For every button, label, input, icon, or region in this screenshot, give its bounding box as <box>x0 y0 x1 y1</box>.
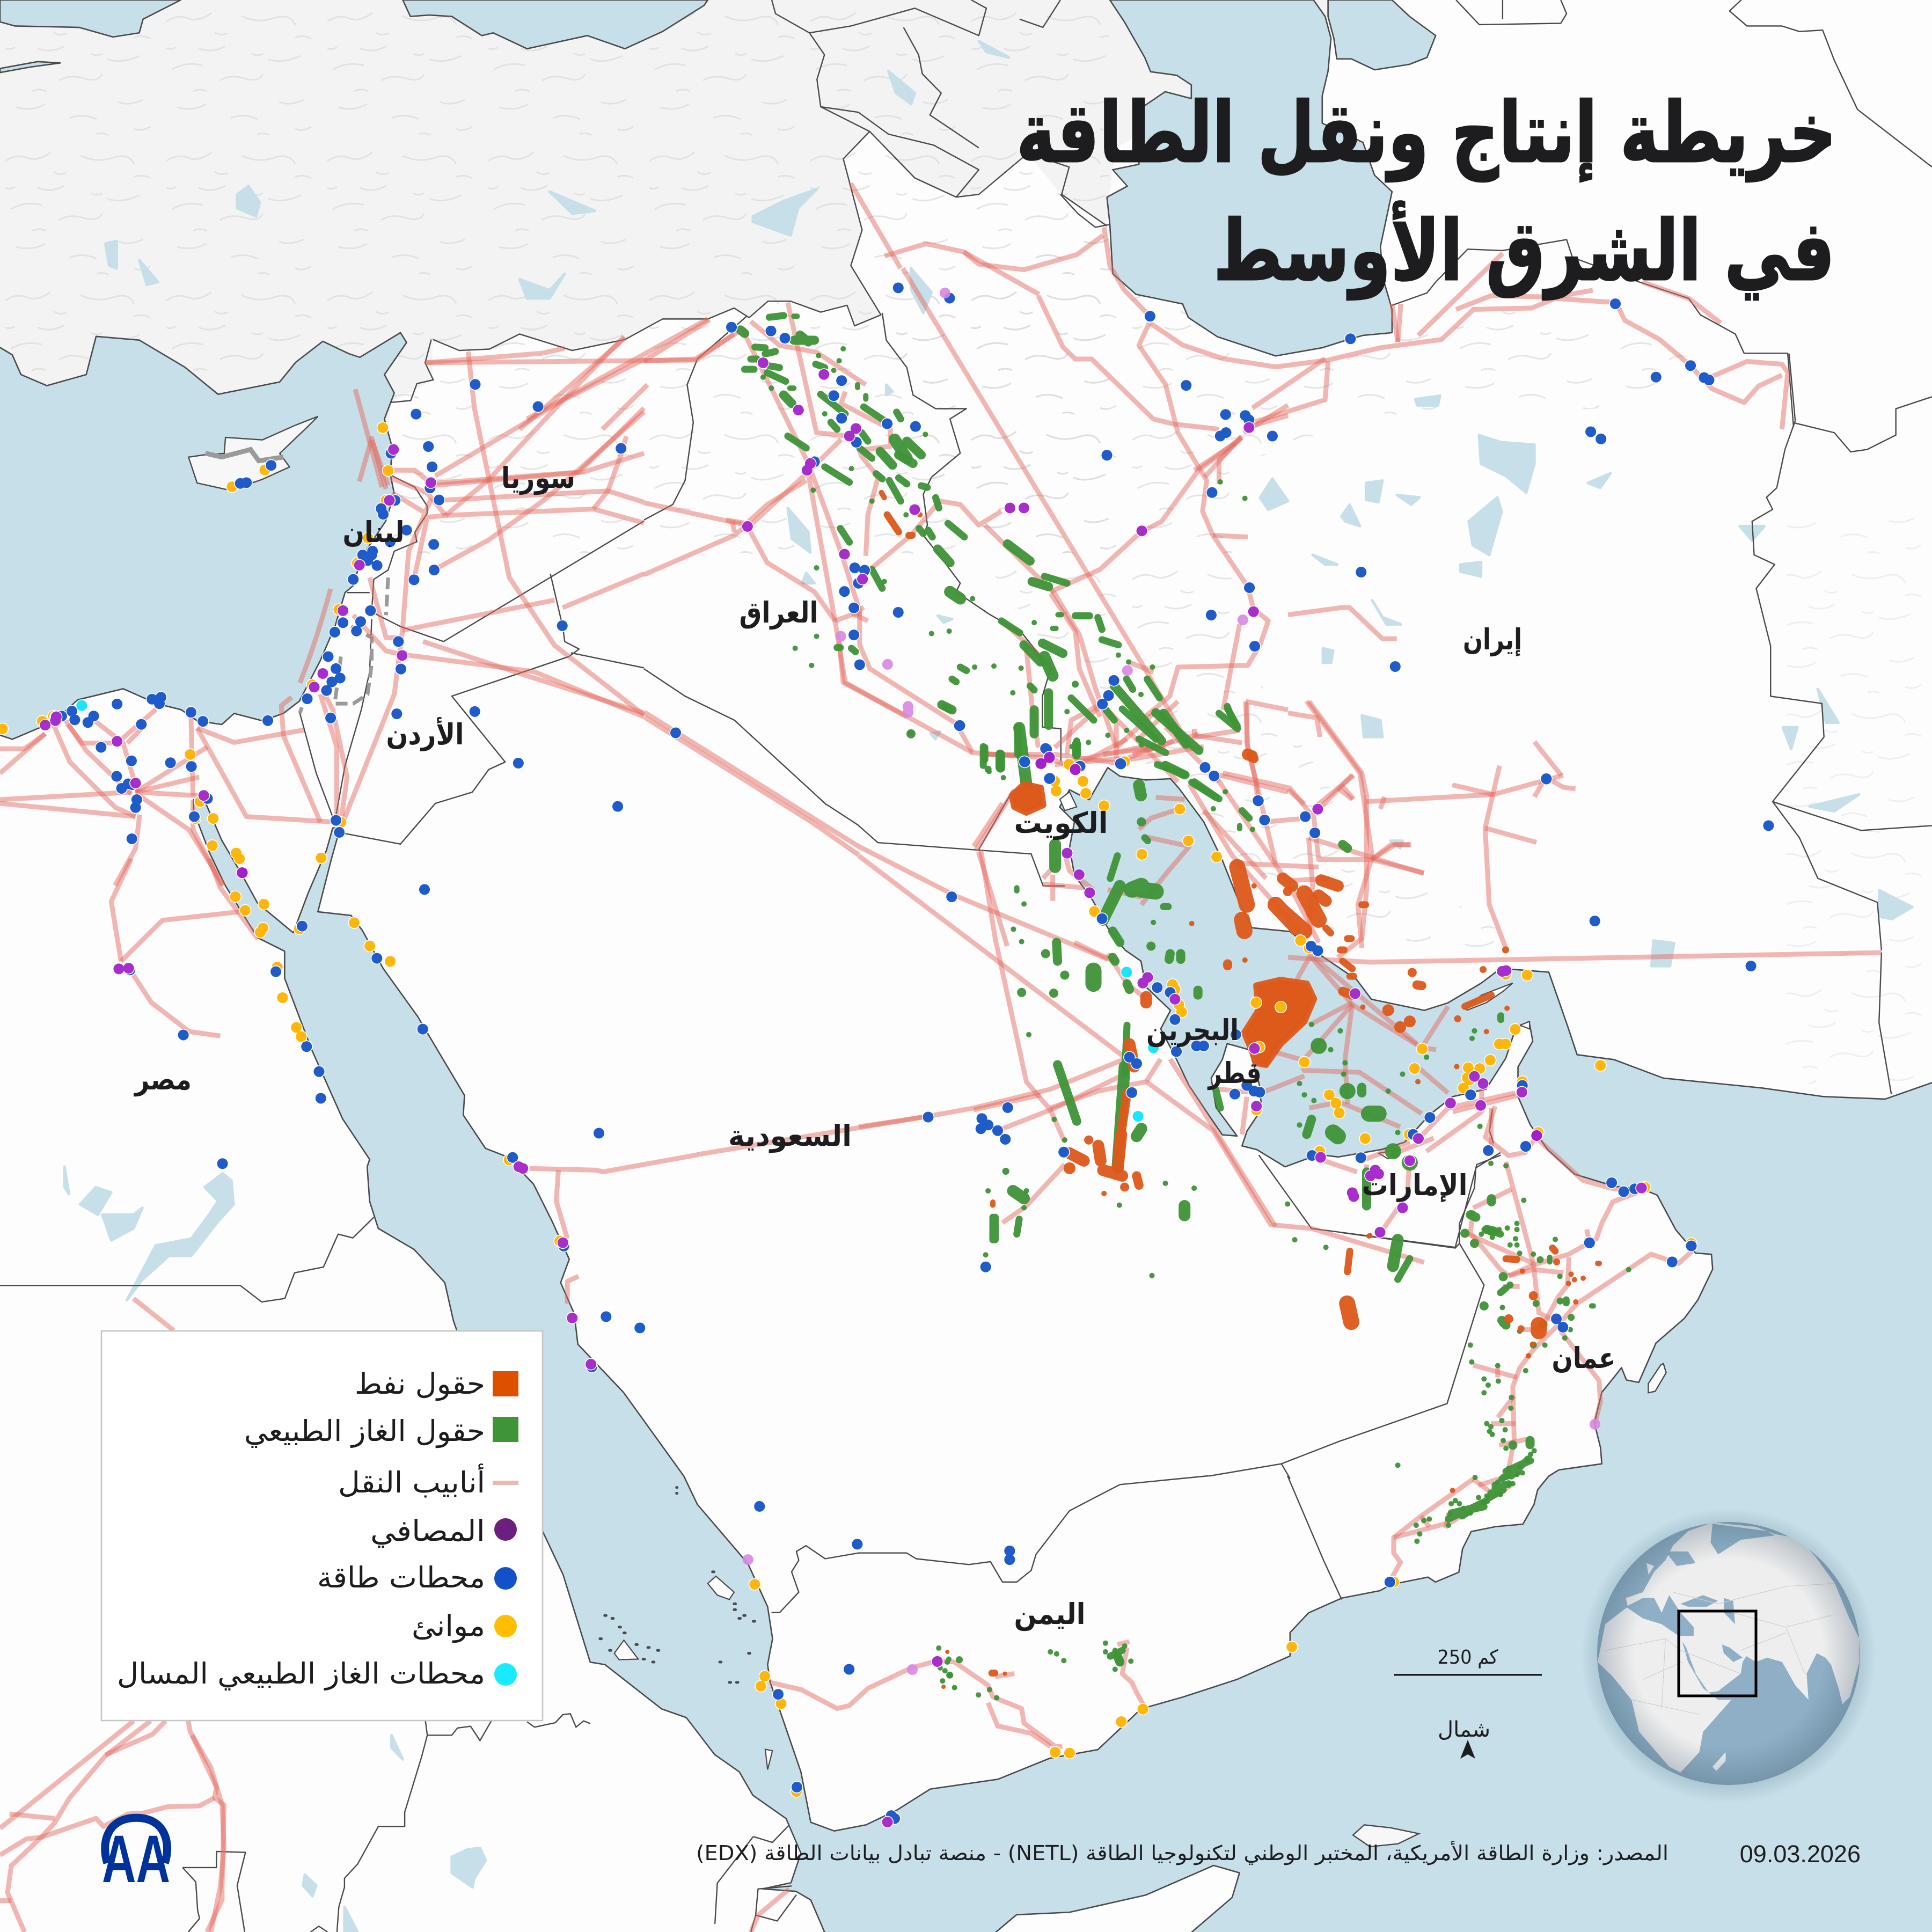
legend: LNG terminals: محطات الغاز الطبيعي المسال <box>117 1657 485 1690</box>
scale bar <box>1394 1646 1542 1675</box>
legend <box>101 1331 543 1721</box>
country labels: الإمارات <box>1362 1168 1467 1202</box>
country labels <box>133 461 1615 1631</box>
natural gas fields <box>741 316 1629 1698</box>
legend: refineries: المصافي <box>370 1514 485 1548</box>
AA logo <box>102 1818 170 1897</box>
north arrow <box>1438 1717 1490 1759</box>
country labels: اليمن <box>1014 1597 1085 1631</box>
legend: ports <box>412 1609 517 1643</box>
legend: oil fields: حقول نفط <box>355 1367 485 1401</box>
country labels: السعودية <box>728 1119 852 1153</box>
country labels: عمان <box>1552 1341 1615 1375</box>
refineries <box>45 363 1642 1822</box>
country labels: إيران <box>1463 623 1522 656</box>
title <box>1016 84 1836 301</box>
locator globe <box>1581 1508 1876 1803</box>
source text: المصدر: وزارة الطاقة الأمريكية، المختبر الوطني لتكنولوجيا الطاقة (NETL) - منصة تبادل بيانات الطاقة (EDX) <box>696 1840 1668 1865</box>
legend: power plants: محطات طاقة <box>317 1561 485 1594</box>
country labels: قطر <box>1207 1056 1261 1090</box>
ports <box>3 428 1692 1791</box>
north arrow: شمال <box>1438 1717 1490 1742</box>
legend: gas fields: حقول الغاز الطبيعي <box>244 1414 485 1448</box>
country labels: الأردن <box>386 717 464 751</box>
country labels: البحرين <box>1146 1013 1239 1047</box>
power plants <box>55 288 1768 1819</box>
AA logo: AA <box>102 1822 170 1897</box>
country labels: لبنان <box>342 515 405 549</box>
country labels: سوريا <box>501 461 575 495</box>
country labels: العراق <box>740 596 818 630</box>
legend: ports: موانئ <box>412 1609 485 1643</box>
country labels: مصر <box>133 1063 192 1096</box>
islands <box>188 416 1666 1847</box>
oil fields <box>881 493 1599 1687</box>
date: 09.03.2026 <box>1740 1840 1861 1868</box>
refineries: planned <box>748 293 1595 1670</box>
country labels: الكويت <box>1014 806 1108 840</box>
legend: pipelines: أنابيب النقل <box>338 1463 485 1499</box>
LNG terminals <box>82 706 1153 1116</box>
scale bar: 250 كم <box>1437 1646 1498 1668</box>
